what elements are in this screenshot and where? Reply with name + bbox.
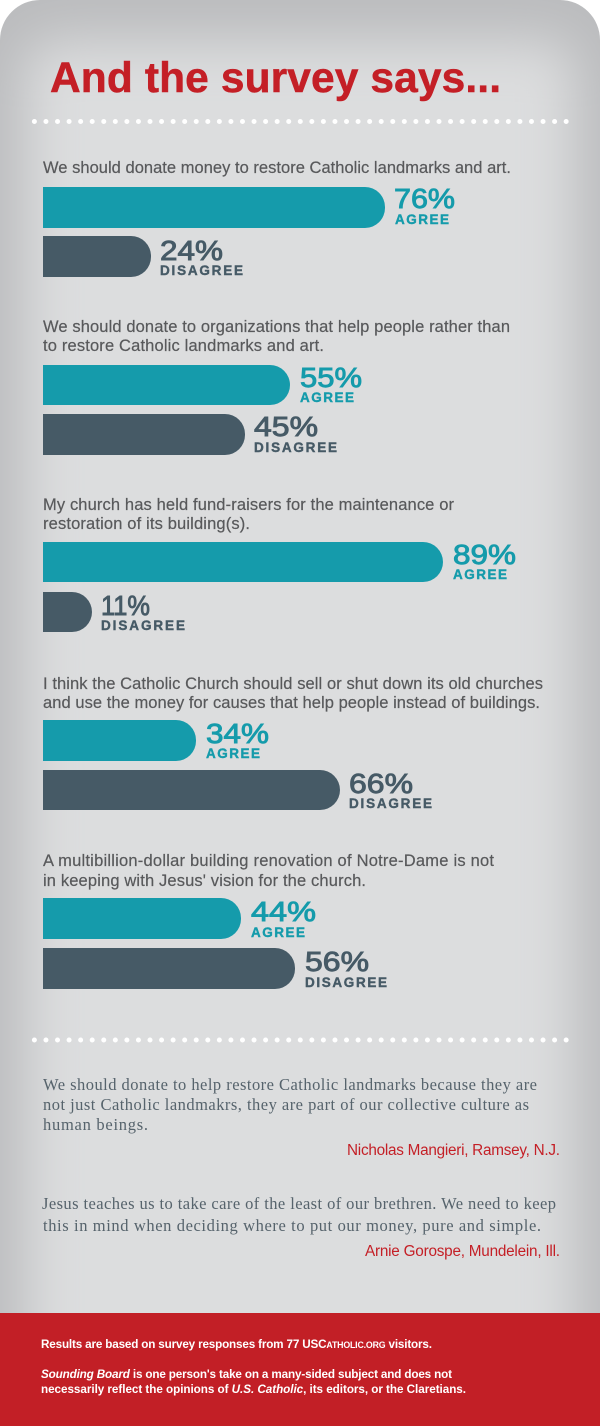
- value: 55% agree: [300, 362, 362, 405]
- bar: agree 34%: [43, 720, 196, 761]
- value: 44% agree: AGREE: [251, 925, 305, 940]
- value: 34% agree: AGREE: [206, 746, 260, 761]
- quote 1: [43, 1075, 537, 1134]
- value: 24% disagree: 24%: [160, 235, 223, 266]
- value: 45% disagree: [254, 411, 337, 455]
- value: 56% disagree: DISAGREE: [305, 975, 387, 990]
- bar: agree 89%: [43, 542, 443, 582]
- value: 66% disagree: 66%: [349, 768, 413, 799]
- quote 2: this in mind when deciding where to put our money, pure and simple.: [43, 1216, 541, 1235]
- question text 2: to restore Catholic landmarks and art.: [43, 337, 324, 355]
- value: 34% agree: 34%: [206, 718, 269, 749]
- footer: disclaimer: [41, 1368, 466, 1396]
- bar: disagree 11%: [43, 592, 92, 632]
- question text 4: [43, 675, 543, 712]
- value: 56% disagree: [305, 946, 387, 990]
- question text 2: We should donate to organizations that help people rather than: [43, 318, 510, 336]
- question text 5: A multibillion-dollar building renovation of Notre-Dame is not: [43, 852, 494, 870]
- question text 3: restoration of its building(s).: [43, 515, 250, 533]
- value: 55% agree: AGREE: [300, 390, 354, 405]
- value: 89% agree: [453, 539, 516, 582]
- value: 24% disagree: [160, 235, 243, 278]
- panel: question 3: [43, 496, 516, 633]
- value: 11% disagree: 11%: [101, 590, 150, 621]
- value: 45% disagree: DISAGREE: [254, 440, 337, 455]
- value: 89% agree: AGREE: [453, 567, 507, 582]
- question text 4: and use the money for causes that help people instead of buildings.: [43, 694, 540, 712]
- value: 44% agree: 44%: [251, 896, 316, 927]
- value: 66% disagree: [349, 768, 432, 811]
- value: 89% agree: 89%: [453, 539, 516, 570]
- bar: disagree 66%: [43, 770, 340, 810]
- quote 2: [42, 1194, 556, 1235]
- attribution 1: Nicholas Mangieri, Ramsey, N.J.: [347, 1142, 560, 1159]
- footer: disclaimer: Sounding Board is one person's take on a many-sided subject and does not: [41, 1368, 452, 1381]
- question text 3: My church has held fund-raisers for the maintenance or: [43, 496, 454, 514]
- title: And the survey says...: [50, 55, 501, 102]
- quote 1: We should donate to help restore Catholic landmarks because they are: [43, 1075, 537, 1094]
- value: 11% disagree: [101, 590, 185, 633]
- question text 1: We should donate money to restore Catholic landmarks and art.: [43, 159, 511, 177]
- question text 4: I think the Catholic Church should sell or shut down its old churches: [43, 675, 543, 693]
- value: 24% disagree: DISAGREE: [160, 263, 243, 278]
- panel: footer: [0, 1313, 600, 1426]
- footer: survey note: Results are based on survey responses from 77 USCATHOLIC.ORG visitors.: [41, 1338, 432, 1351]
- panel: question 2: [43, 318, 510, 455]
- bar: disagree 56%: [43, 948, 295, 989]
- panel: question 5: [43, 852, 494, 990]
- bar: agree 76%: [43, 187, 385, 228]
- value: 76% agree: 76%: [394, 183, 455, 214]
- question text 5: [43, 852, 494, 890]
- question text 2: [43, 318, 510, 355]
- bar: disagree 45%: [43, 414, 245, 455]
- value: 34% agree: [206, 718, 269, 761]
- panel: question 1: [43, 159, 511, 278]
- quote 1: human beings.: [43, 1115, 148, 1134]
- value: 55% agree: 55%: [300, 362, 362, 393]
- value: 45% disagree: 45%: [254, 411, 318, 442]
- quote 2: Jesus teaches us to take care of the least of our brethren. We need to keep: [42, 1194, 556, 1213]
- bar: disagree 24%: [43, 236, 151, 277]
- attribution 2: Arnie Gorospe, Mundelein, Ill.: [365, 1243, 560, 1260]
- question text 3: [43, 496, 454, 533]
- panel: question 4: [43, 675, 543, 811]
- value: 76% agree: [394, 183, 455, 227]
- quote 1: not just Catholic landmakrs, they are part of our collective culture as: [43, 1095, 529, 1114]
- bar: agree 44%: [43, 898, 241, 939]
- value: 56% disagree: 56%: [305, 946, 369, 977]
- value: 44% agree: [251, 896, 316, 940]
- value: 66% disagree: DISAGREE: [349, 796, 432, 811]
- bar: agree 55%: [43, 365, 290, 405]
- footer: disclaimer: necessarily reflect the opinions of U.S. Catholic, its editors, or the Claretians.: [41, 1383, 466, 1396]
- value: 11% disagree: DISAGREE: [101, 618, 185, 633]
- value: 76% agree: AGREE: [395, 212, 449, 227]
- question text 5: in keeping with Jesus' vision for the church.: [43, 872, 366, 890]
